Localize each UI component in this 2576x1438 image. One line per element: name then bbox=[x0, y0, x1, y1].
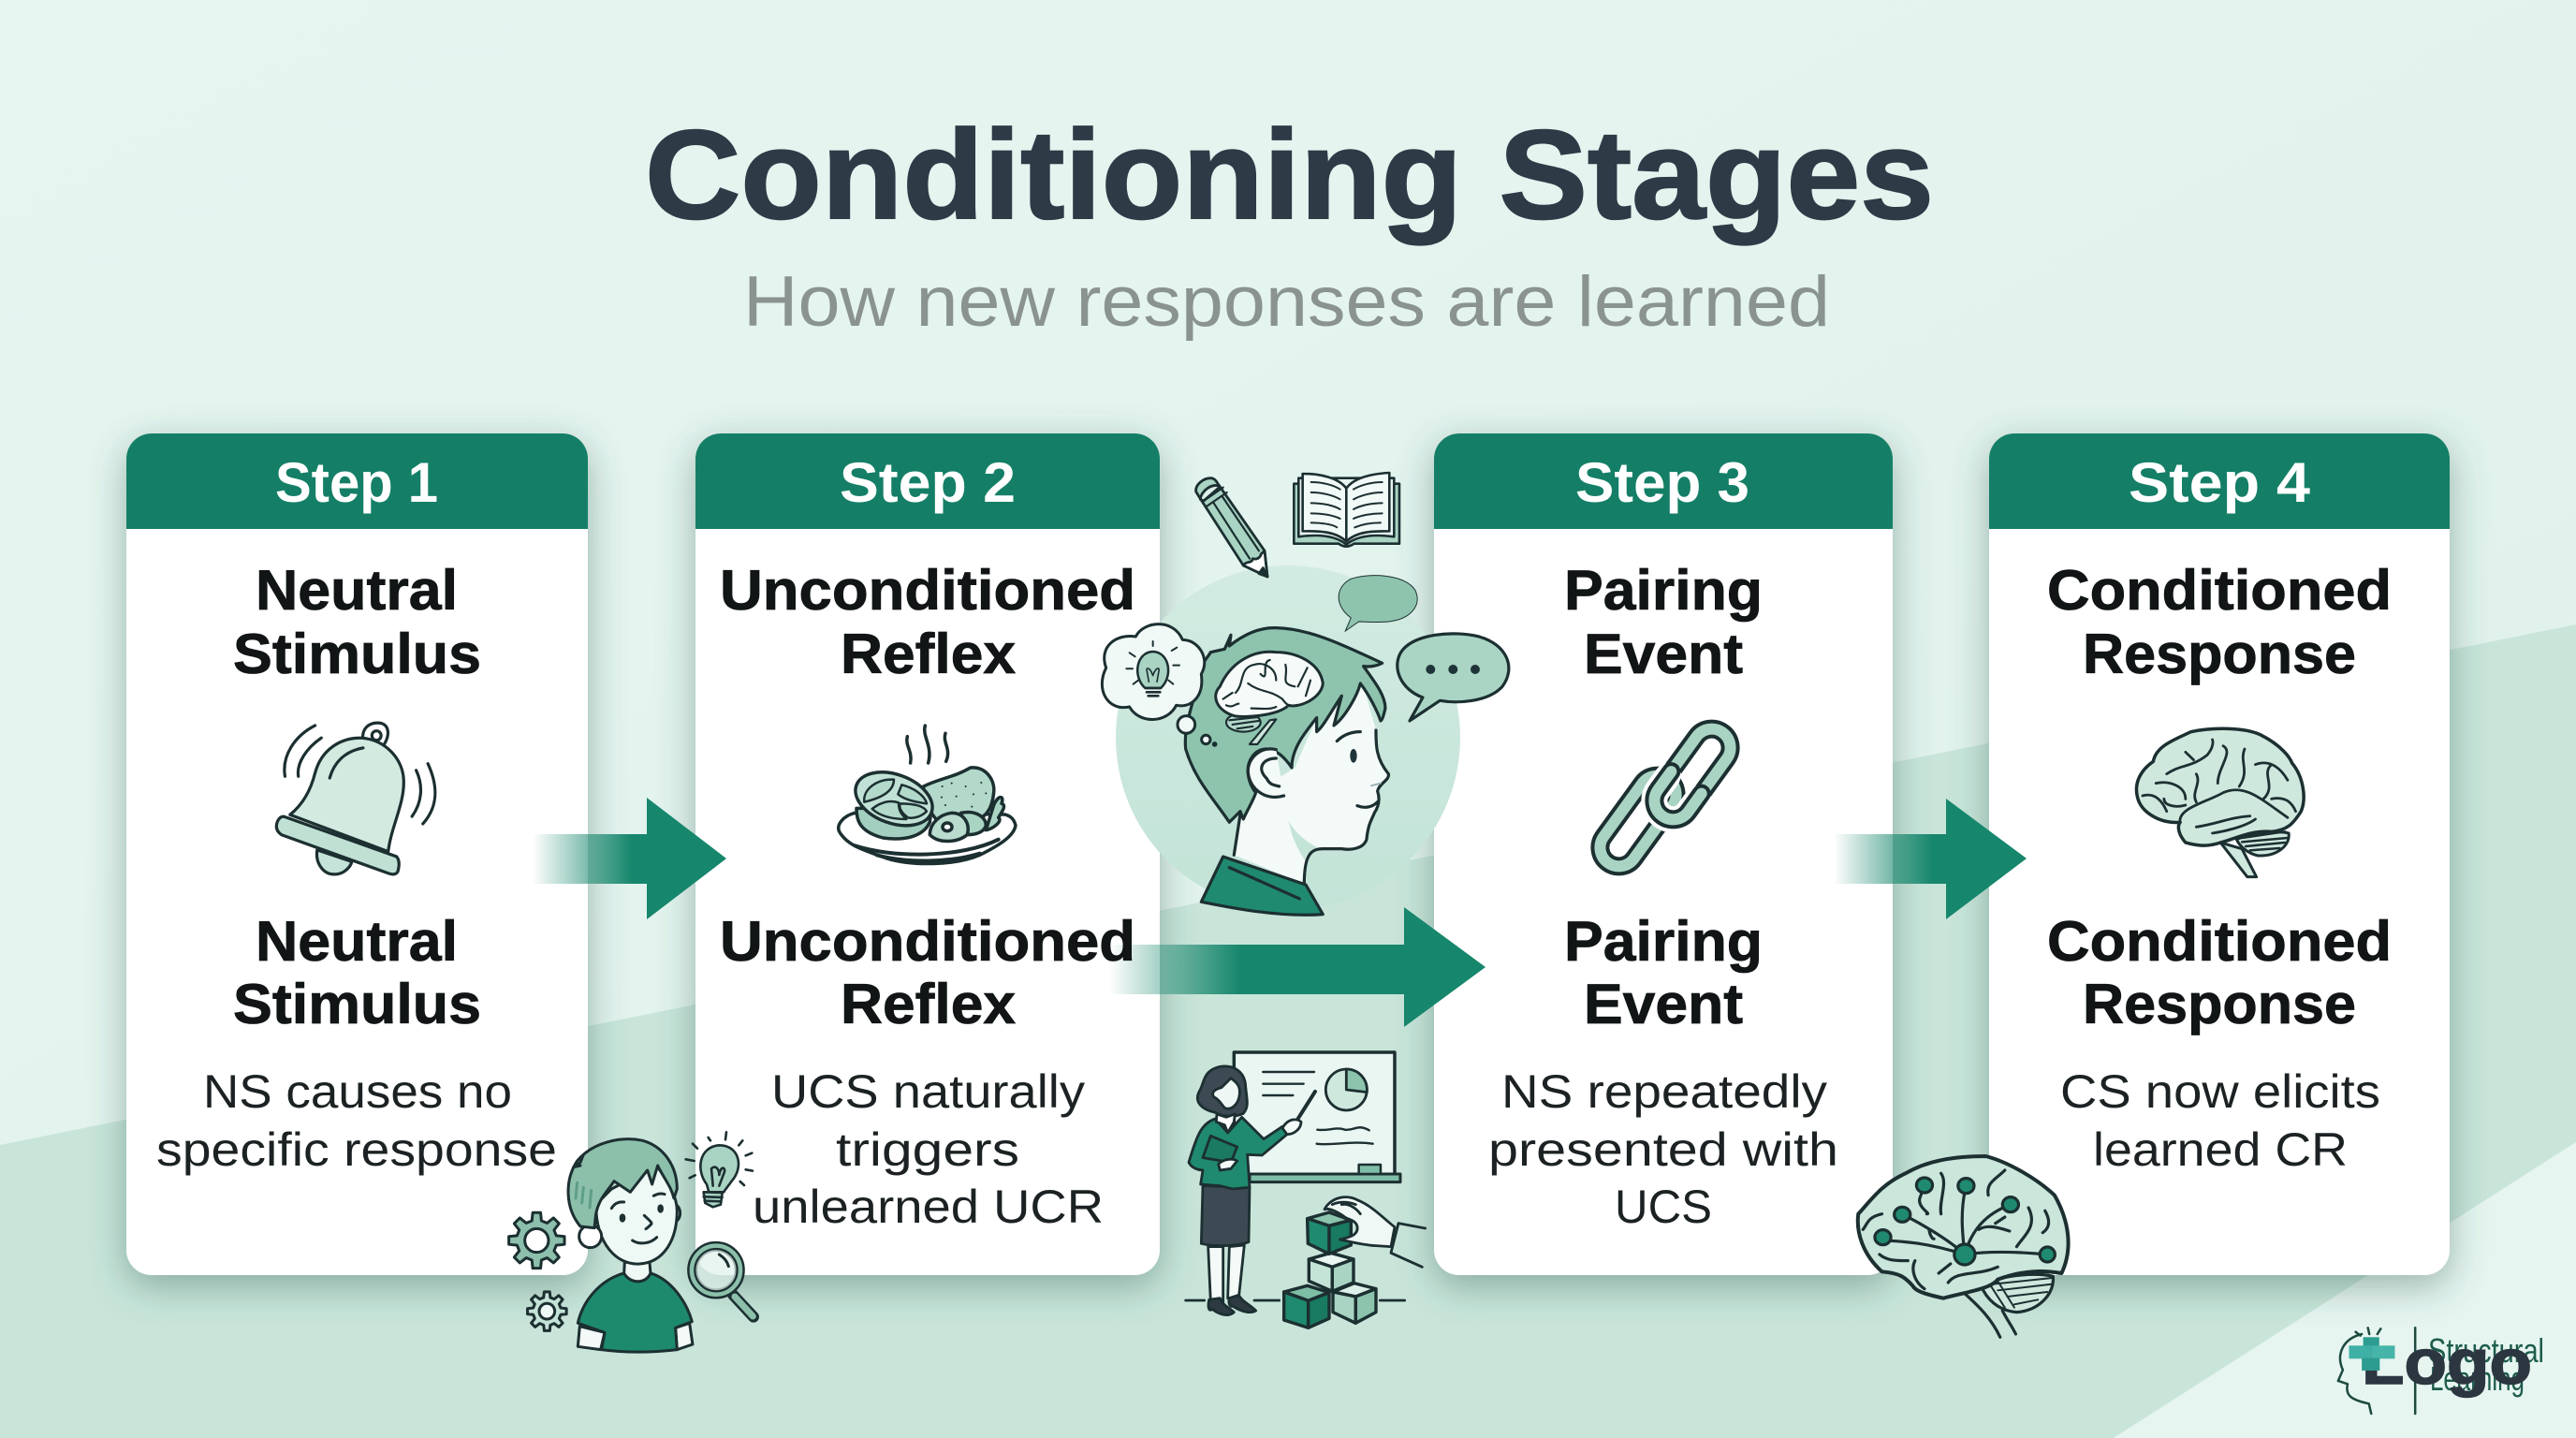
panel: step 4 card bbox=[1989, 433, 2450, 1275]
step 3 heading: Pairing bbox=[1564, 559, 1763, 622]
step 1 heading bbox=[233, 559, 481, 685]
step 2 description: unlearned UCR bbox=[753, 1181, 1104, 1233]
logo tagline: Structural bbox=[2428, 1331, 2544, 1370]
step 2 heading bbox=[720, 559, 1135, 685]
step 4 label: Step 4 bbox=[2129, 451, 2311, 514]
step 2 description: triggers bbox=[836, 1123, 1019, 1176]
icon: open book bbox=[1294, 473, 1399, 547]
step 4 second heading: Response bbox=[2083, 973, 2356, 1035]
magnifying glass bbox=[693, 1246, 754, 1317]
hand bbox=[1325, 1197, 1426, 1267]
step 3 text bbox=[1488, 451, 1838, 1233]
step 3 heading: Event bbox=[1584, 623, 1743, 685]
panel: step 2 card bbox=[695, 433, 1160, 1275]
step 2 heading: Reflex bbox=[841, 623, 1016, 685]
step 1 second heading: Neutral bbox=[256, 910, 458, 973]
step 3 label: Step 3 bbox=[1575, 451, 1749, 514]
step 1 description: specific response bbox=[156, 1123, 557, 1176]
illustration: brain with network bbox=[1858, 1156, 2069, 1337]
step 2 label: Step 2 bbox=[840, 451, 1016, 514]
step 3 description: UCS bbox=[1615, 1181, 1712, 1233]
step 1 text bbox=[156, 451, 557, 1176]
step 1 description bbox=[156, 1065, 557, 1176]
illustration: teacher and blocks bbox=[1186, 1052, 1426, 1328]
arrow: step 2 to step 3 bbox=[1109, 907, 1486, 1027]
step 3 heading bbox=[1564, 559, 1763, 685]
step 4 description bbox=[2060, 1065, 2380, 1176]
icon: chain link bbox=[1592, 722, 1738, 873]
lightbulb bbox=[686, 1132, 753, 1207]
step 1 second heading: Stimulus bbox=[233, 973, 481, 1035]
panel: step 1 card bbox=[126, 433, 588, 1275]
step 3 description: NS repeatedly bbox=[1501, 1065, 1827, 1118]
subtitle: How new responses are learned bbox=[743, 262, 1830, 342]
step 4 heading: Conditioned bbox=[2047, 559, 2392, 622]
step 2 second heading: Unconditioned bbox=[720, 910, 1135, 973]
logo divider bbox=[2414, 1328, 2416, 1414]
logo head outline bbox=[2338, 1334, 2371, 1414]
step 3 second heading: Pairing bbox=[1564, 910, 1763, 973]
title: Conditioning Stages bbox=[645, 104, 1934, 245]
step 2 heading: Unconditioned bbox=[720, 559, 1135, 622]
step 2 text bbox=[720, 451, 1135, 1233]
illustration: learner head with brain bbox=[1102, 473, 1509, 915]
thought bubble with lightbulb bbox=[1102, 624, 1216, 745]
boy profile bbox=[1185, 628, 1388, 915]
icon: speech bubble with dots bbox=[1398, 634, 1509, 721]
child figure bbox=[568, 1139, 693, 1352]
arrow: step 1 to step 2 bbox=[533, 798, 726, 919]
step 4 description: learned CR bbox=[2093, 1123, 2348, 1176]
whiteboard bbox=[1234, 1052, 1400, 1182]
small gear bbox=[528, 1292, 566, 1330]
step 3 description: presented with bbox=[1488, 1123, 1838, 1176]
icon: speech bubble bbox=[1339, 576, 1417, 631]
step 2 description: UCS naturally bbox=[771, 1065, 1085, 1118]
step 2 second heading: Reflex bbox=[841, 973, 1016, 1035]
logo cross mark bbox=[2349, 1337, 2394, 1371]
big gear bbox=[509, 1212, 564, 1269]
step 4 second heading: Conditioned bbox=[2047, 910, 2392, 973]
step 1 second heading bbox=[233, 910, 481, 1035]
step 2 description bbox=[753, 1065, 1104, 1233]
step 2 second heading bbox=[720, 910, 1135, 1035]
step 4 text bbox=[2047, 451, 2392, 1176]
illustration: child with gears bbox=[509, 1132, 754, 1352]
step 1 heading: Neutral bbox=[256, 559, 458, 622]
logo bbox=[2338, 1328, 2415, 1414]
step 4 heading: Response bbox=[2083, 623, 2356, 685]
background circle bbox=[1116, 565, 1460, 910]
logo wordmark: Logo bbox=[2362, 1327, 2532, 1398]
step 3 second heading: Event bbox=[1584, 973, 1743, 1035]
panel: step 3 card bbox=[1434, 433, 1893, 1275]
icon: brain bbox=[2136, 728, 2304, 877]
icon: meal plate bbox=[839, 726, 1016, 864]
step 1 label: Step 1 bbox=[275, 451, 438, 514]
step 3 description bbox=[1488, 1065, 1838, 1233]
icon: pencil bbox=[1196, 478, 1267, 577]
step 4 second heading bbox=[2047, 910, 2392, 1035]
arrow: step 3 to step 4 bbox=[1834, 799, 2027, 919]
step 4 heading bbox=[2047, 559, 2392, 685]
logo tagline: Learning bbox=[2430, 1359, 2525, 1398]
brain inside head bbox=[1216, 652, 1323, 744]
icon: bell bbox=[276, 723, 435, 874]
logo tagline bbox=[2428, 1331, 2544, 1398]
teacher bbox=[1186, 1066, 1405, 1315]
step 4 description: CS now elicits bbox=[2060, 1065, 2380, 1118]
step 1 heading: Stimulus bbox=[233, 623, 481, 685]
step 3 second heading bbox=[1564, 910, 1763, 1035]
step 1 description: NS causes no bbox=[203, 1065, 512, 1118]
logo rays bbox=[2356, 1328, 2380, 1336]
blocks bbox=[1284, 1212, 1376, 1328]
